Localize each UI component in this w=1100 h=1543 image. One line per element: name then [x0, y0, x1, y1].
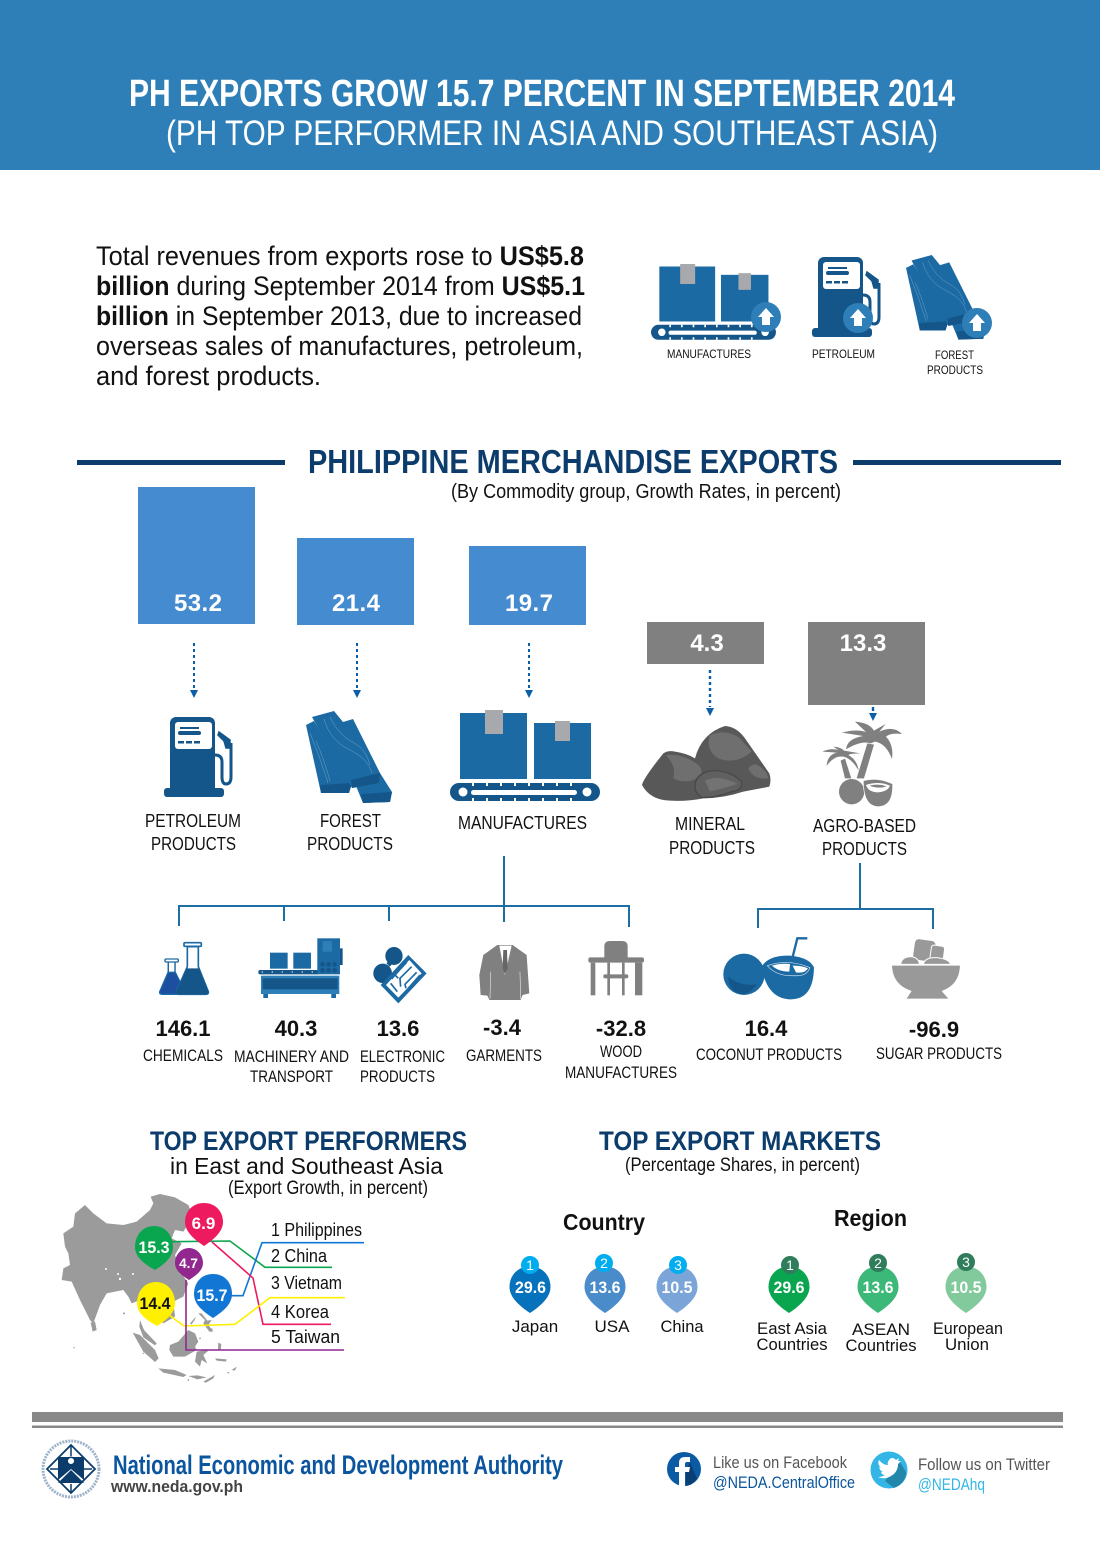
- bar chart: growth rates: [138, 487, 925, 705]
- item: sugar products: [876, 939, 1002, 1063]
- intro paragraph: and forest products.: [96, 361, 321, 391]
- marker: ASEAN: [846, 1254, 916, 1355]
- item: wood manufactures: -32.8: [596, 1016, 646, 1041]
- marker: Japan: Japan: [512, 1317, 558, 1336]
- item: sugar products: -96.9: [909, 1017, 959, 1042]
- item: wood manufactures: WOOD: [600, 1043, 642, 1061]
- heading: top export markets: (Percentage Shares, in percent): [625, 1155, 860, 1176]
- footer rules: [32, 1412, 1063, 1428]
- heading: top export markets: TOP EXPORT MARKETS: [599, 1126, 881, 1156]
- item: chemicals: CHEMICALS: [143, 1047, 223, 1065]
- item: electronic products: 13.6: [377, 1016, 419, 1041]
- icon: manufactures up: [651, 264, 781, 361]
- item: garments: GARMENTS: [466, 1047, 542, 1065]
- summary icons: [651, 255, 992, 377]
- heading: top export performers: [150, 1126, 467, 1199]
- marker: East Asia: [756, 1256, 828, 1354]
- commodity: agro-based products: PRODUCTS: [822, 839, 907, 859]
- footer: organisation name: www.neda.gov.ph: [110, 1477, 243, 1496]
- marker: ASEAN: 2: [874, 1255, 882, 1271]
- marker: ASEAN: Countries: [846, 1336, 916, 1355]
- item: garments: [466, 945, 542, 1065]
- icon: manufactures up: MANUFACTURES: [667, 347, 751, 361]
- icon: forest products up: PRODUCTS: [927, 363, 983, 377]
- commodity: petroleum products: [145, 717, 241, 854]
- item: sugar products: SUGAR PRODUCTS: [876, 1045, 1002, 1063]
- item: electronic products: ELECTRONIC: [360, 1048, 445, 1066]
- footer: Twitter: @NEDAhq: [918, 1475, 985, 1494]
- ranking list: [271, 1220, 362, 1347]
- footer: Twitter: [870, 1452, 1050, 1494]
- marker: USA: USA: [595, 1317, 630, 1336]
- panel: region markets: Region: [834, 1205, 907, 1231]
- intro paragraph: overseas sales of manufactures, petroleum,: [96, 331, 583, 361]
- item: coconut products: [696, 938, 842, 1064]
- logo: NEDA seal: [43, 1441, 99, 1497]
- connector: agro breakdown: [758, 863, 933, 929]
- footer: Facebook: @NEDA.CentralOffice: [713, 1473, 855, 1492]
- marker: USA: 13.6: [590, 1278, 620, 1297]
- item: machinery and transport: TRANSPORT: [250, 1068, 333, 1086]
- commodity: forest products: FOREST: [320, 811, 381, 831]
- commodity: forest products: [306, 711, 393, 854]
- section heading: merchandise exports: PHILIPPINE MERCHANDISE EXPORTS: [308, 443, 838, 480]
- item: garments: -3.4: [483, 1015, 522, 1040]
- panel: country markets: Country: [563, 1209, 645, 1235]
- commodity: manufactures: [450, 710, 600, 833]
- heading: top export markets: [599, 1126, 881, 1176]
- panel: region markets: [756, 1205, 1003, 1355]
- item: coconut products: COCONUT PRODUCTS: [696, 1046, 842, 1064]
- item: wood manufactures: [565, 941, 677, 1082]
- heading: top export performers: (Export Growth, in percent): [228, 1178, 428, 1199]
- intro paragraph: Total revenues from exports rose to US$5.8: [96, 241, 584, 271]
- marker: Japan: [510, 1256, 558, 1336]
- marker: East Asia: Countries: [756, 1335, 828, 1354]
- map: East and Southeast Asia: [62, 1194, 237, 1383]
- pin: Korea 6.9: 6.9: [192, 1214, 215, 1233]
- marker: European Union: [933, 1253, 1003, 1354]
- ranking list: 5 Taiwan: [271, 1327, 340, 1347]
- item: coconut products: 16.4: [745, 1016, 788, 1041]
- commodity: forest products: PRODUCTS: [307, 834, 393, 854]
- pin: China 15.3: [135, 1226, 173, 1270]
- commodity: agro-based products: AGRO-BASED: [813, 816, 916, 836]
- marker: European Union: Union: [945, 1335, 989, 1354]
- marker: European Union: 10.5: [950, 1278, 982, 1297]
- marker: China: [656, 1256, 704, 1336]
- item: electronic products: PRODUCTS: [360, 1068, 435, 1086]
- commodity: manufactures: MANUFACTURES: [458, 813, 587, 833]
- icon: forest products up: FOREST: [935, 348, 975, 362]
- marker: USA: 2: [600, 1255, 608, 1271]
- marker: China: 3: [674, 1257, 682, 1273]
- bar chart: growth rates: 19.7: [505, 590, 553, 617]
- item: wood manufactures: MANUFACTURES: [565, 1064, 677, 1082]
- pin: Taiwan 4.7: 4.7: [179, 1256, 198, 1271]
- ranking list: 1 Philippines: [271, 1220, 362, 1240]
- item: chemicals: 146.1: [155, 1016, 211, 1041]
- marker: USA: [584, 1254, 630, 1336]
- intro paragraph: billion during September 2014 from US$5.1: [96, 271, 585, 301]
- bar chart: growth rates: 4.3: [690, 630, 724, 657]
- icon: petroleum up: [812, 257, 879, 361]
- commodity: agro-based products: [813, 722, 916, 859]
- footer: Facebook: Like us on Facebook: [713, 1453, 847, 1472]
- footer: Facebook: [667, 1452, 855, 1492]
- commodity: petroleum products: PETROLEUM: [145, 811, 241, 831]
- chart lines: connecting pins to ranking: [170, 1241, 364, 1350]
- intro paragraph: billion in September 2013, due to increased: [96, 301, 582, 331]
- pin: Taiwan 4.7: [175, 1248, 203, 1280]
- panel: country markets: [510, 1209, 704, 1336]
- arrows: dotted down: [190, 643, 877, 721]
- marker: China: China: [660, 1317, 704, 1336]
- item: machinery and transport: MACHINERY AND: [234, 1048, 349, 1066]
- marker: Japan: 1: [526, 1257, 534, 1273]
- item: electronic products: [360, 947, 445, 1086]
- icon: petroleum up: PETROLEUM: [812, 347, 875, 361]
- item: machinery and transport: [234, 938, 349, 1086]
- item: chemicals: [143, 943, 223, 1065]
- marker: ASEAN: 13.6: [862, 1278, 894, 1297]
- marker: ASEAN: ASEAN: [852, 1320, 910, 1339]
- pin: Korea 6.9: [185, 1203, 223, 1246]
- ranking list: 3 Vietnam: [271, 1273, 342, 1293]
- heading: top export performers: in East and Southeast Asia: [170, 1153, 443, 1179]
- marker: East Asia: East Asia: [757, 1319, 828, 1338]
- commodity: mineral products: [642, 726, 770, 858]
- connector: manufactures breakdown: [179, 856, 629, 927]
- heading: top export performers: TOP EXPORT PERFORMERS: [150, 1126, 467, 1156]
- marker: East Asia: 1: [786, 1257, 794, 1273]
- header banner: (PH TOP PERFORMER IN ASIA AND SOUTHEAST ASIA): [166, 114, 938, 153]
- footer: Twitter: Follow us on Twitter: [918, 1455, 1050, 1474]
- commodity: mineral products: PRODUCTS: [669, 838, 755, 858]
- pin: Vietnam 14.4: 14.4: [140, 1294, 171, 1313]
- ranking list: 4 Korea: [271, 1302, 330, 1322]
- pin: China 15.3: 15.3: [138, 1238, 170, 1257]
- pin: Vietnam 14.4: [137, 1282, 175, 1326]
- section heading: merchandise exports: [77, 443, 1061, 503]
- marker: China: 10.5: [662, 1278, 692, 1297]
- bar chart: growth rates: 13.3: [840, 630, 886, 657]
- section heading: merchandise exports: (By Commodity group, Growth Rates, in percent): [451, 481, 841, 503]
- header banner: [0, 0, 1100, 170]
- icon: forest products up: [906, 255, 992, 377]
- marker: European Union: 3: [962, 1254, 970, 1270]
- commodity: mineral products: MINERAL: [675, 814, 745, 834]
- intro paragraph: [96, 241, 585, 391]
- marker: East Asia: 29.6: [774, 1278, 804, 1297]
- ranking list: 2 China: [271, 1246, 328, 1266]
- pin: Philippines 15.7: [194, 1274, 232, 1318]
- bar chart: growth rates: 53.2: [174, 590, 222, 617]
- bar chart: growth rates: 21.4: [332, 590, 381, 617]
- pin: Philippines 15.7: 15.7: [196, 1286, 228, 1305]
- item: machinery and transport: 40.3: [275, 1016, 317, 1041]
- marker: Japan: 29.6: [515, 1278, 546, 1297]
- marker: European Union: European: [933, 1319, 1003, 1338]
- footer: organisation name: [110, 1450, 563, 1496]
- commodity: petroleum products: PRODUCTS: [151, 834, 236, 854]
- footer: organisation name: National Economic and Development Authority: [113, 1450, 563, 1480]
